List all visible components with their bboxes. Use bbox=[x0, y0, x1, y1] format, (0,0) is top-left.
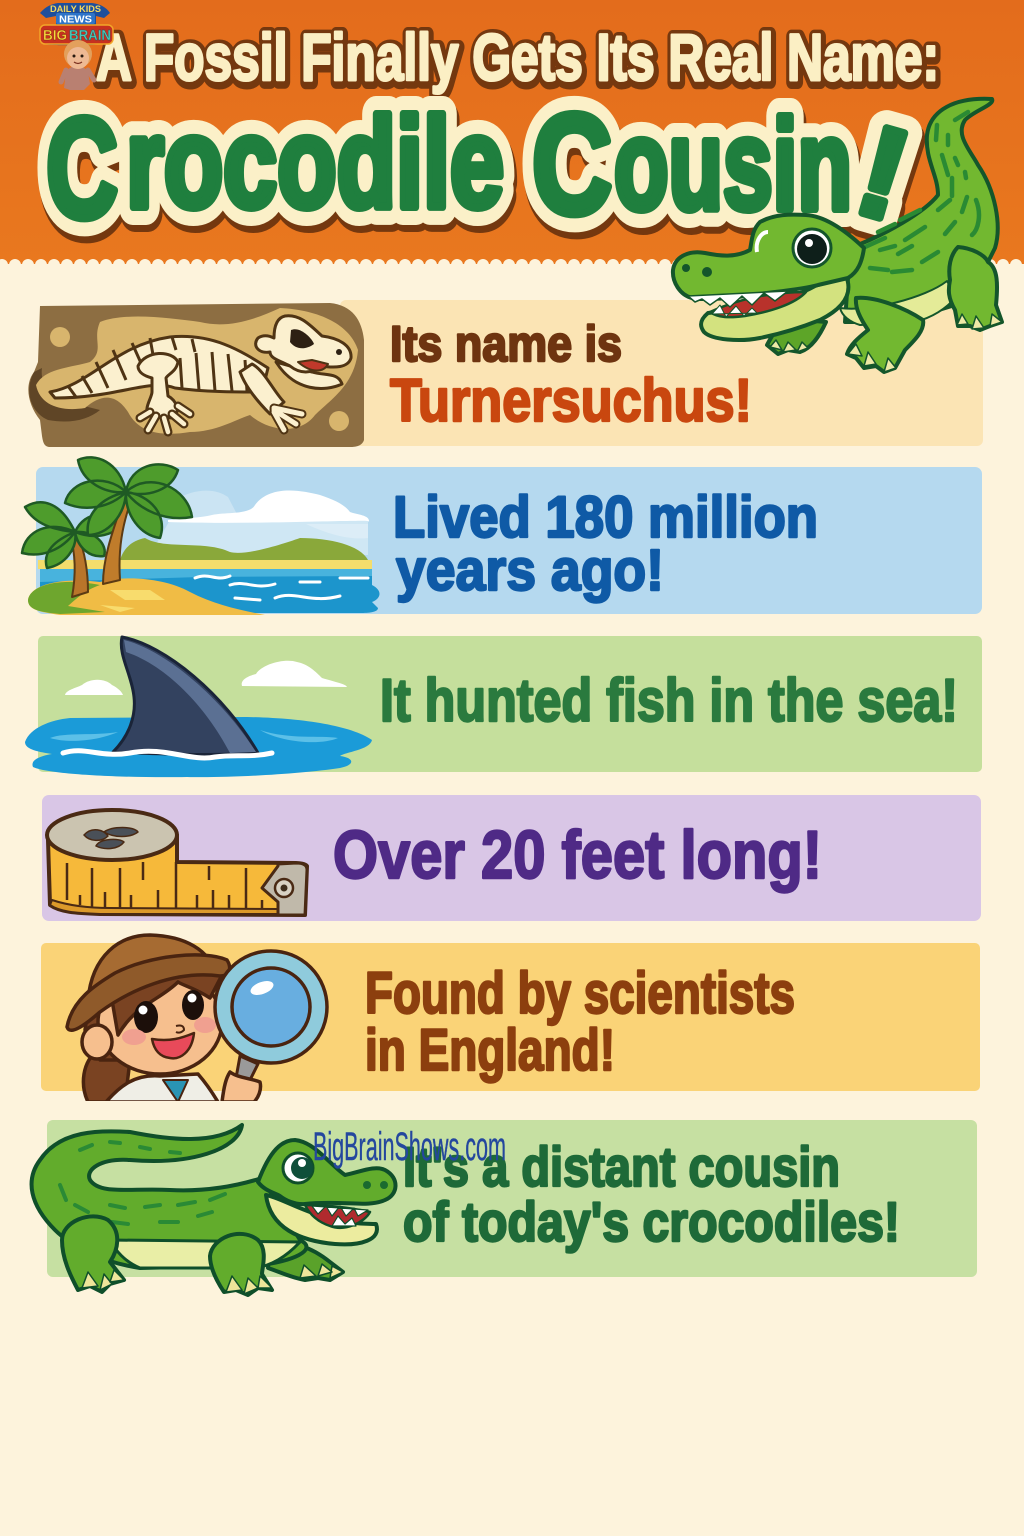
braid bbox=[82, 1058, 131, 1101]
cheeks bbox=[122, 1017, 216, 1045]
icon: tape measure bbox=[47, 810, 307, 915]
fringe bbox=[112, 971, 222, 1035]
title green letters: rocodile bbox=[126, 92, 504, 235]
foam bbox=[63, 751, 272, 758]
title cream outline: ousin bbox=[614, 94, 852, 237]
icon: fossil slab bbox=[28, 303, 364, 447]
small palm bbox=[22, 502, 120, 597]
nostrils bbox=[363, 1181, 388, 1189]
logo: Daily Kids News Big Brain: BRAIN bbox=[69, 27, 111, 44]
mouth bbox=[152, 1033, 194, 1058]
metal tip bbox=[262, 863, 307, 915]
title cream outline: rocodile bbox=[126, 92, 504, 235]
eyes bbox=[134, 990, 204, 1033]
text: Turnersuchus: Turnersuchus! bbox=[390, 367, 752, 434]
coat bbox=[106, 1074, 218, 1102]
claws bbox=[82, 1270, 124, 1290]
panel: size bbox=[42, 795, 981, 921]
grommet bbox=[275, 879, 293, 897]
clouds bbox=[168, 491, 369, 523]
title cream outline bbox=[46, 85, 923, 248]
lower jaw bbox=[701, 276, 848, 340]
upper teeth bbox=[688, 291, 788, 307]
claws bbox=[226, 1276, 272, 1294]
roll top bbox=[47, 810, 177, 860]
far leg bbox=[268, 1244, 343, 1280]
back leg bbox=[949, 247, 1002, 330]
title shadow layer bbox=[48, 91, 925, 254]
body and tail bbox=[845, 99, 998, 322]
island bbox=[28, 578, 265, 615]
title cream outline: ! bbox=[843, 99, 923, 248]
sand line bbox=[38, 560, 372, 569]
far leg bbox=[767, 318, 826, 354]
title green letters bbox=[46, 85, 923, 248]
teeth bbox=[712, 305, 757, 317]
front leg bone bbox=[240, 364, 284, 414]
text: found by scientists: Found by scientists bbox=[365, 961, 795, 1026]
icon: scientist girl bbox=[67, 935, 327, 1102]
lower jaw bbox=[266, 1195, 377, 1244]
title shadow layer: ousin bbox=[616, 100, 854, 243]
fin edge highlight bbox=[124, 640, 256, 753]
text: distant cousin: It's a distant cousin bbox=[403, 1135, 840, 1198]
eye bbox=[757, 229, 831, 267]
title cream outline: C bbox=[532, 85, 612, 244]
header banner bbox=[0, 0, 1024, 274]
title green letters: ousin bbox=[614, 94, 852, 237]
panel: relation bbox=[47, 1120, 977, 1277]
main title bbox=[46, 85, 925, 254]
back leg bone bbox=[138, 353, 178, 418]
eye bbox=[283, 1153, 313, 1183]
hand bbox=[222, 1072, 261, 1102]
title shadow layer: C bbox=[534, 91, 614, 250]
hills bbox=[120, 538, 368, 560]
back leg bbox=[62, 1216, 124, 1292]
ear bbox=[82, 1025, 112, 1059]
text: over 20 feet: Over 20 feet long! bbox=[333, 817, 822, 893]
text: its name is: Its name is bbox=[390, 316, 622, 372]
text: in England: in England! bbox=[365, 1018, 615, 1083]
mouth bbox=[305, 1205, 370, 1228]
panel: discovery bbox=[41, 943, 980, 1091]
ticks bbox=[67, 862, 262, 908]
text: today's crocodiles: of today's crocodiles! bbox=[403, 1190, 900, 1253]
wave highlights bbox=[195, 576, 368, 600]
teeth bbox=[312, 1206, 368, 1226]
upper head bbox=[258, 1140, 396, 1204]
icon: tropical beach scene bbox=[22, 457, 380, 615]
roll slot bbox=[84, 828, 138, 849]
icon: fin in the sea bbox=[25, 637, 372, 777]
handle bbox=[236, 1056, 258, 1084]
front leg bbox=[210, 1234, 272, 1295]
hair back bbox=[83, 1017, 117, 1062]
panel: name bbox=[340, 300, 983, 446]
panel: age bbox=[36, 467, 982, 614]
water bbox=[25, 717, 372, 777]
body and tail bbox=[32, 1125, 306, 1268]
title green letters: C bbox=[46, 89, 118, 248]
icon: crocodile top right bbox=[673, 99, 1002, 372]
title shadow layer: C bbox=[48, 95, 120, 254]
mouth bbox=[710, 292, 806, 317]
skeleton bbox=[50, 316, 351, 432]
shark fin bbox=[113, 637, 258, 755]
logo: Daily Kids News Big Brain: NEWS bbox=[59, 14, 92, 26]
body scutes bbox=[865, 112, 979, 272]
sky bbox=[150, 520, 368, 555]
logo: Daily Kids News Big Brain: DAILY KIDS bbox=[50, 4, 101, 14]
watermark: BigBrainShows.com bbox=[313, 1125, 506, 1169]
title green letters: ! bbox=[843, 99, 923, 248]
hat crown bbox=[88, 933, 206, 990]
title shadow layer: rocodile bbox=[128, 98, 506, 241]
skull bbox=[276, 362, 342, 389]
text: lived: Lived 180 million bbox=[393, 485, 818, 550]
panel: diet bbox=[38, 636, 982, 772]
belly bbox=[110, 1240, 300, 1268]
sand patch bbox=[36, 308, 358, 434]
icon: crocodile bottom left bbox=[32, 1125, 396, 1295]
snout and head bbox=[673, 215, 864, 299]
title cream outline: C bbox=[46, 89, 118, 248]
belly bbox=[840, 281, 956, 325]
nostrils bbox=[682, 264, 712, 277]
logo: Daily Kids News Big Brain bbox=[40, 3, 113, 90]
icon: logo mascot bbox=[61, 40, 94, 90]
water bbox=[40, 569, 380, 613]
title green letters: C bbox=[532, 85, 612, 244]
clouds bbox=[65, 661, 347, 695]
magnifier bbox=[215, 951, 327, 1063]
title shadow layer: ! bbox=[845, 105, 925, 254]
hat brim bbox=[67, 955, 230, 1030]
big palm bbox=[65, 457, 192, 584]
tape body bbox=[48, 835, 307, 915]
face bbox=[96, 984, 222, 1074]
front leg bbox=[847, 298, 923, 372]
logo: Daily Kids News Big Brain: BIG bbox=[43, 27, 67, 44]
text: years ago: years ago! bbox=[396, 538, 664, 603]
nose bbox=[176, 1026, 184, 1033]
bottom edge bbox=[50, 900, 278, 914]
scutes bbox=[60, 1142, 225, 1224]
